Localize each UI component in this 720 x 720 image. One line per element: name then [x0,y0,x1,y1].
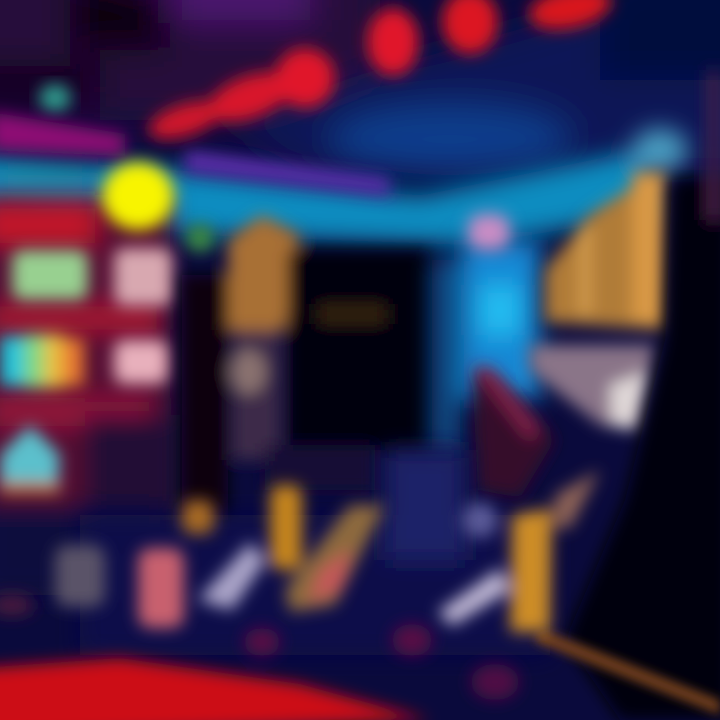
floor and carpet [0,450,720,720]
magenta neon bands [0,112,390,196]
icon: ceiling light [39,84,71,112]
red neon sign [144,0,615,147]
right slot machine [432,170,665,498]
orange carpet edge [535,628,720,715]
red carpet [0,595,519,720]
ceiling background [0,0,720,175]
left slot machines [0,162,214,595]
machine legs and stools [55,470,600,632]
icon: yellow light [102,162,214,252]
cyan wall band [0,128,688,245]
slot screens [0,248,172,494]
right black cabinet [565,70,720,720]
central slot machine [182,215,430,520]
